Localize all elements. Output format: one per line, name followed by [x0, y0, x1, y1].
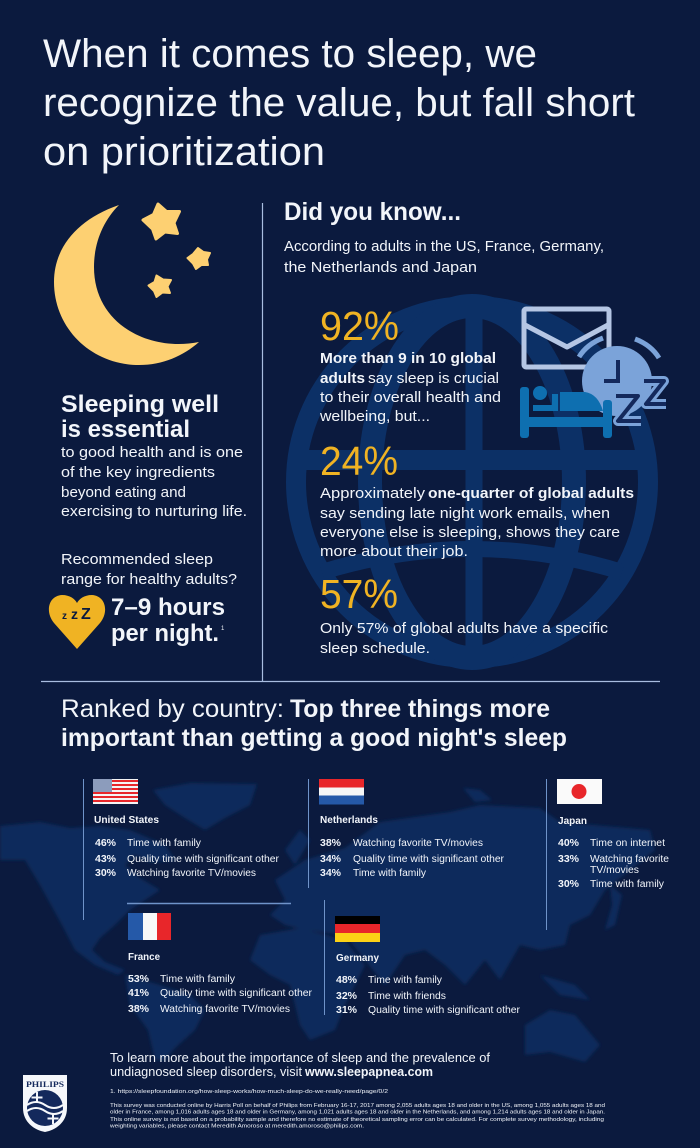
- icon: envelope: [524, 309, 609, 367]
- text block: sleeping well is essential: beyond eating and: [61, 485, 186, 501]
- stat: 24%: [320, 438, 634, 560]
- section divider: [41, 680, 660, 682]
- stat: 92%: to their overall health and: [320, 390, 501, 406]
- icon: heart with zzz: [49, 595, 105, 649]
- text block: surveyed countries: According to adults in the US, France, Germany,: [284, 239, 604, 255]
- text block: surveyed countries: the Netherlands and Japan: [284, 260, 477, 276]
- text block: sleeping well is essential: [61, 391, 247, 520]
- panel: Japan: Japan: [558, 815, 587, 827]
- icon: sleeping z letters: [616, 381, 666, 421]
- panel: Germany: Quality time with significant other: [368, 1005, 521, 1016]
- stat: 24%: say sending late night work emails, when: [320, 506, 610, 522]
- text block: surveyed countries: [284, 239, 604, 276]
- background globe: [296, 306, 648, 658]
- stat: 57%: [320, 571, 608, 657]
- stat: 24%: everyone else is sleeping, shows they care: [320, 525, 620, 541]
- icon: heart with zzz: Z: [81, 606, 91, 623]
- call to action: To learn more about the importance of sleep and the prevalence of: [110, 1051, 491, 1065]
- icon: alarm clock: [579, 338, 659, 416]
- panel: Germany: Time with family: [368, 975, 442, 986]
- logo: Philips shield: [23, 1075, 67, 1132]
- panel: Germany: Germany: [336, 952, 379, 964]
- flag: United States: [93, 779, 138, 804]
- panel: Netherlands: 34%: [320, 853, 342, 865]
- survey methodology: [109, 1103, 605, 1130]
- panel: United States: Watching favorite TV/movies: [127, 868, 256, 879]
- footnote: 1. https://sleepfoundation.org/how-sleep-works/how-much-sleep-do-we-really-need/page/0/2: [110, 1089, 388, 1095]
- call to action: [110, 1051, 491, 1079]
- panel: Japan: [546, 779, 669, 930]
- callout: 7-9 hours per night: per night.: [111, 620, 219, 647]
- panel: Japan: Watching favorite: [590, 854, 669, 865]
- panel: Netherlands: 34%: [320, 867, 342, 879]
- text block: sleeping well is essential: of the key ingredients: [61, 465, 215, 481]
- icon: email, alarm clock, bed and zzz: [520, 309, 666, 438]
- stat: 24%: Approximately: [320, 486, 426, 502]
- stat: 92%: wellbeing, but...: [319, 409, 430, 425]
- panel: Japan: Time on internet: [590, 838, 665, 849]
- title: When it comes to sleep, we: [43, 32, 537, 76]
- panel: Netherlands: Quality time with significant other: [353, 854, 505, 865]
- stat: 57%: 57%: [320, 571, 398, 617]
- panel: France: Watching favorite TV/movies: [160, 1004, 290, 1015]
- panel: France: 53%: [128, 973, 150, 985]
- stat: 92%: adults: [320, 371, 365, 387]
- panel: United States: 46%: [95, 837, 117, 849]
- text block: sleeping well is essential: is essential: [61, 416, 190, 443]
- panel: United States: 43%: [95, 853, 117, 865]
- panel: Netherlands: 38%: [320, 837, 342, 849]
- panel: United States: [84, 779, 280, 920]
- flag: France: [128, 913, 171, 940]
- panel: France: Time with family: [160, 974, 235, 985]
- text block: recommended sleep range: range for healthy adults?: [61, 572, 237, 588]
- world map background: [0, 783, 655, 1062]
- stat: 92%: [319, 303, 501, 425]
- icon: heart with zzz: z: [71, 606, 78, 622]
- heading: ranked by country: Ranked by country:: [61, 695, 284, 723]
- callout: 7-9 hours per night: 1: [221, 626, 225, 632]
- icon: bed with sleeper: [520, 386, 612, 438]
- text block: sleeping well is essential: Sleeping well: [61, 391, 219, 418]
- stat: 24%: more about their job.: [320, 544, 468, 560]
- panel: France: 41%: [128, 987, 150, 999]
- panel: Germany: [324, 900, 521, 1016]
- text block: recommended sleep range: Recommended sleep: [61, 552, 213, 568]
- panel: Netherlands: Time with family: [353, 868, 426, 879]
- call to action: www.sleepapnea.com: [304, 1065, 433, 1079]
- heading: ranked by country: [61, 695, 567, 752]
- stat: 24%: 24%: [320, 438, 398, 484]
- left column divider: [262, 203, 264, 681]
- panel: France: France: [128, 951, 160, 963]
- stat: 92%: More than 9 in 10 global: [320, 351, 496, 367]
- panel: Netherlands: Netherlands: [320, 814, 378, 826]
- panel: Japan: 33%: [558, 853, 580, 865]
- panel: Japan: 40%: [558, 837, 580, 849]
- heading: ranked by country: important than getting a good night's sleep: [61, 724, 567, 752]
- survey methodology: older in France, among 1,016 adults ages 18 and older in Germany, among 1,021 adults ages 18 and older in the Netherlands, and among 1,214 adults ages 18 and older in Japan.: [110, 1110, 605, 1116]
- call to action: undiagnosed sleep disorders, visit: [110, 1065, 303, 1079]
- stat: 92%: say sleep is crucial: [368, 371, 499, 387]
- panel: United States: 30%: [95, 867, 117, 879]
- stat: 57%: Only 57% of global adults have a specific: [320, 621, 608, 637]
- panel: Germany: 48%: [336, 974, 358, 986]
- survey methodology: weighting variables, please contact Meredith Amoroso at meredith.amoroso@philips.com.: [109, 1124, 364, 1130]
- flag: Netherlands: [319, 779, 364, 804]
- text block: sleeping well is essential: to good health and is one: [61, 445, 243, 461]
- callout: 7-9 hours per night: 7–9 hours: [111, 594, 225, 621]
- title: [43, 32, 635, 174]
- panel: United States: United States: [94, 814, 159, 826]
- title: on prioritization: [43, 130, 325, 174]
- panel: Netherlands: [308, 779, 505, 888]
- panel: Germany: Time with friends: [368, 991, 446, 1002]
- icon: crescent moon and stars: [54, 204, 210, 365]
- heading: ranked by country: Top three things more: [290, 695, 550, 723]
- flag: Japan: [557, 779, 602, 804]
- text block: recommended sleep range: [61, 552, 237, 588]
- panel: Germany: 31%: [336, 1004, 358, 1016]
- panel: Germany: 32%: [336, 990, 358, 1002]
- callout: 7-9 hours per night: [111, 594, 225, 647]
- panel: France: [127, 904, 313, 1015]
- panel: France: 38%: [128, 1003, 150, 1015]
- heading: did you know: Did you know...: [284, 198, 461, 226]
- stat: 57%: sleep schedule.: [320, 641, 430, 657]
- panel: United States: Quality time with significant other: [127, 854, 280, 865]
- survey methodology: This online survey is not based on a probability sample and therefore no estimate of theoretical sampling error can be calculated. For complete survey methodology, including: [110, 1117, 604, 1123]
- panel: Netherlands: Watching favorite TV/movies: [353, 838, 483, 849]
- flag: Germany: [335, 916, 380, 942]
- logo: Philips shield: PHILIPS: [26, 1080, 65, 1089]
- panel: Japan: Time with family: [590, 879, 664, 890]
- panel: France: Quality time with significant other: [160, 988, 313, 999]
- survey methodology: This survey was conducted online by Harris Poll on behalf of Philips from February 16-17, 2017 among 2,055 adults ages 18 and older in the US, among 1,055 adults ages 18 and: [110, 1103, 605, 1109]
- stat: 92%: 92%: [320, 303, 399, 349]
- title: recognize the value, but fall short: [43, 81, 635, 125]
- text block: sleeping well is essential: exercising to nurturing life.: [61, 504, 247, 520]
- stat: 24%: one-quarter of global adults: [428, 486, 634, 502]
- panel: United States: Time with family: [127, 838, 201, 849]
- panel: Japan: 30%: [558, 878, 580, 890]
- panel: Japan: TV/movies: [590, 865, 639, 876]
- icon: heart with zzz: z: [62, 611, 67, 622]
